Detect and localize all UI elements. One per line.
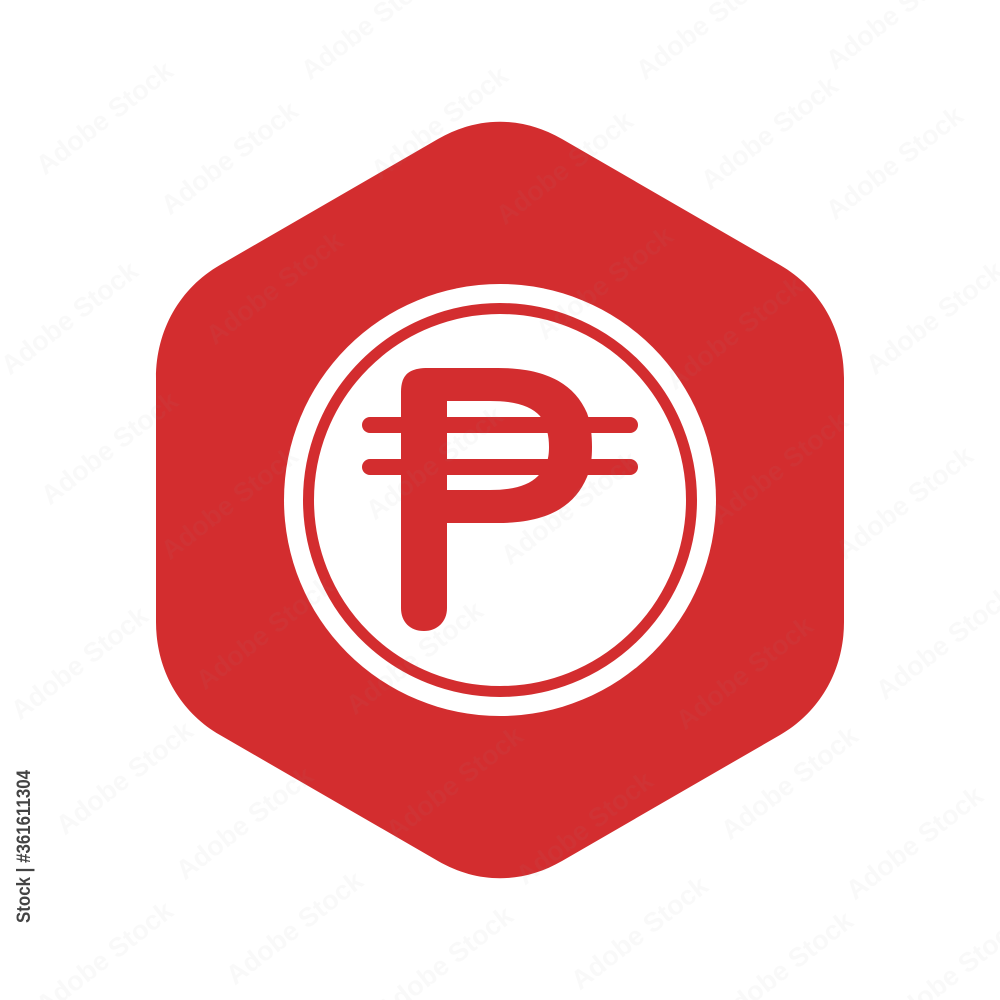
watermark pattern: Adobe Stock: [715, 720, 864, 846]
watermark pattern: Adobe Stock: [200, 225, 349, 351]
watermark pattern: Adobe Stock: [365, 60, 514, 186]
watermark pattern: Adobe Stock: [5, 600, 154, 726]
watermark pattern: Adobe Stock: [660, 270, 809, 396]
watermark pattern: Adobe Stock: [840, 780, 989, 906]
watermark pattern: Adobe Stock: [830, 440, 979, 566]
watermark pattern: Adobe Stock: [155, 95, 304, 221]
watermark pattern: Adobe Stock: [820, 100, 969, 226]
watermark pattern: Adobe Stock: [495, 445, 644, 571]
watermark pattern: Adobe Stock: [340, 595, 489, 721]
watermark pattern: Adobe Stock: [190, 570, 339, 696]
watermark pattern: Adobe Stock: [220, 865, 369, 991]
watermark pattern: Adobe Stock: [30, 55, 179, 181]
icon: peso sign: [362, 368, 638, 631]
hexagon badge: [156, 122, 844, 878]
side credit text: Stock | #361611304: [14, 770, 35, 923]
watermark pattern: Adobe Stock: [170, 760, 319, 886]
watermark pattern: Adobe Stock: [705, 405, 854, 531]
coin: white disc with red ring: [284, 284, 716, 716]
watermark pattern: Adobe Stock: [155, 440, 304, 566]
watermark pattern: Adobe Stock: [490, 105, 639, 231]
watermark pattern: Adobe Stock: [510, 765, 659, 891]
watermark pattern: Adobe Stock: [50, 715, 199, 841]
watermark pattern: Adobe Stock: [670, 610, 819, 736]
watermark pattern: Adobe Stock: [565, 870, 714, 996]
watermark pattern: Adobe Stock: [530, 220, 679, 346]
watermark pattern: Adobe Stock: [380, 720, 529, 846]
watermark pattern: Adobe Stock: [35, 385, 184, 511]
watermark pattern: Adobe Stock: [695, 70, 844, 196]
watermark pattern: Adobe Stock: [360, 400, 509, 526]
